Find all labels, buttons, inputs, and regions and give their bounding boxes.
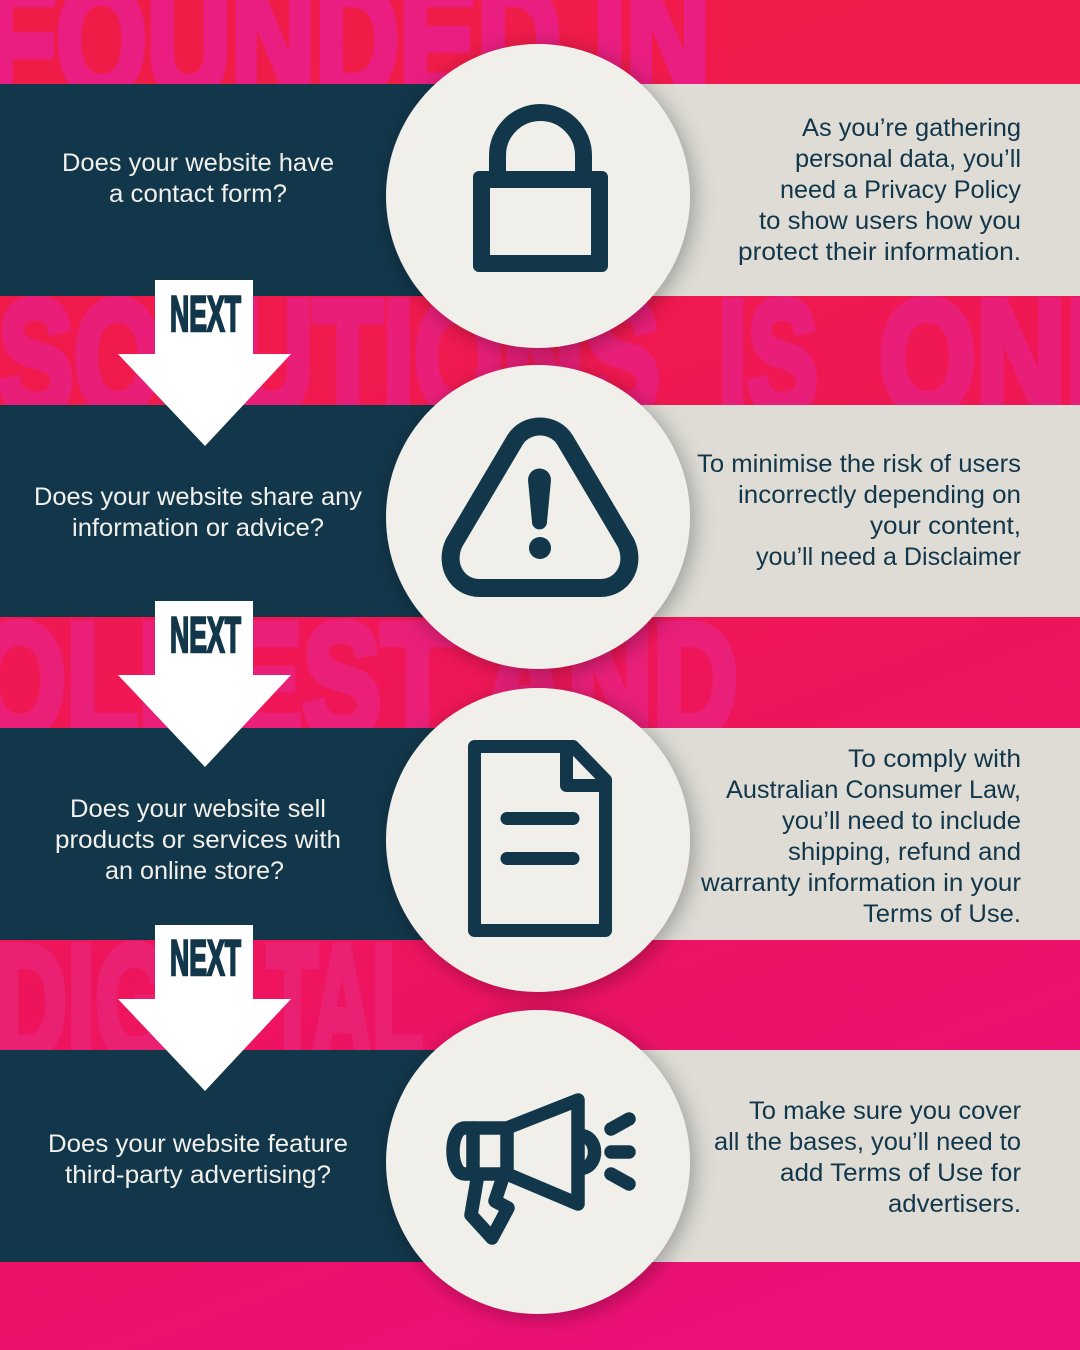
icon: document bbox=[474, 746, 606, 930]
answer text 2: your content, bbox=[870, 512, 1021, 540]
answer text 2: To minimise the risk of users bbox=[697, 450, 1021, 478]
answer text 3: shipping, refund and bbox=[788, 838, 1021, 866]
question text 3: an online store? bbox=[105, 857, 284, 885]
answer text 4: all the bases, you’ll need to bbox=[714, 1128, 1021, 1156]
headline row: SOLUTIONS IS ONE bbox=[0, 296, 1080, 405]
answer text 3: warranty information in your bbox=[700, 869, 1021, 897]
headline row: DIGITAL: DIG bbox=[0, 912, 174, 1091]
question text 3 bbox=[55, 795, 341, 885]
question text 3: Does your website sell bbox=[70, 795, 326, 823]
circle 4 bbox=[386, 1010, 690, 1314]
answer text 1: As you’re gathering bbox=[802, 114, 1021, 142]
question text 2: information or advice? bbox=[72, 514, 324, 542]
panel: answer band 4 bbox=[540, 1050, 1080, 1262]
panel: answer band 3 bbox=[540, 728, 1080, 940]
headline row: SOLUTIONS IS ONE: SOLUTIONS bbox=[0, 267, 660, 446]
headline row: DIGITAL bbox=[0, 940, 422, 1050]
answer text 4: advertisers. bbox=[888, 1190, 1021, 1218]
answer text 2: incorrectly depending on bbox=[738, 481, 1021, 509]
answer text 1: protect their information. bbox=[738, 238, 1021, 266]
arrow label: NEXT bbox=[170, 286, 241, 342]
question text 1: a contact form? bbox=[109, 180, 287, 208]
panel: question band 1 bbox=[0, 84, 540, 296]
answer text 4: add Terms of Use for bbox=[780, 1159, 1021, 1187]
question text 4: third-party advertising? bbox=[65, 1161, 331, 1189]
answer text 4: To make sure you cover bbox=[749, 1097, 1021, 1125]
arrow 1 with NEXT bbox=[118, 280, 291, 446]
icon: padlock bbox=[473, 112, 608, 272]
icon: megaphone bbox=[453, 1100, 629, 1238]
answer text 4 bbox=[714, 1097, 1021, 1218]
circle 2 bbox=[386, 365, 690, 669]
question text 2: Does your website share any bbox=[34, 483, 363, 511]
answer text 2 bbox=[697, 450, 1021, 571]
answer text 3: Terms of Use. bbox=[863, 900, 1021, 928]
question text 4: Does your website feature bbox=[48, 1130, 348, 1158]
arrow 3 with NEXT bbox=[118, 925, 291, 1091]
answer text 1: need a Privacy Policy bbox=[780, 176, 1021, 204]
headline row: OLDEST AND: OLDEST AND bbox=[0, 590, 738, 769]
panel: question band 3 bbox=[0, 728, 540, 940]
icon: warning triangle bbox=[451, 426, 629, 588]
arrow 2 with NEXT bbox=[118, 601, 291, 767]
circle 1 bbox=[386, 44, 690, 348]
answer text 1: to show users how you bbox=[759, 207, 1021, 235]
answer text 3 bbox=[700, 745, 1021, 928]
question text 1 bbox=[62, 149, 334, 208]
question text 4 bbox=[48, 1130, 348, 1189]
panel: question band 2 bbox=[0, 405, 540, 617]
answer text 1: personal data, you’ll bbox=[795, 145, 1021, 173]
answer text 3: Australian Consumer Law, bbox=[726, 776, 1021, 804]
headline row: SOLUTIONS IS ONE: IS bbox=[718, 267, 818, 446]
answer text 1 bbox=[738, 114, 1021, 266]
headline row: DIGITAL: TAL bbox=[267, 912, 423, 1091]
answer text 3: you’ll need to include bbox=[782, 807, 1021, 835]
answer text 3: To comply with bbox=[848, 745, 1021, 773]
panel: answer band 1 bbox=[540, 84, 1080, 296]
arrow label: NEXT bbox=[170, 930, 241, 986]
question text 2 bbox=[34, 483, 363, 542]
circle 3 bbox=[386, 688, 690, 992]
arrow label: NEXT bbox=[170, 607, 241, 663]
panel: question band 4 bbox=[0, 1050, 540, 1262]
panel: answer band 2 bbox=[540, 405, 1080, 617]
answer text 2: you’ll need a Disclaimer bbox=[756, 543, 1021, 571]
question text 3: products or services with bbox=[55, 826, 341, 854]
question text 1: Does your website have bbox=[62, 149, 334, 177]
